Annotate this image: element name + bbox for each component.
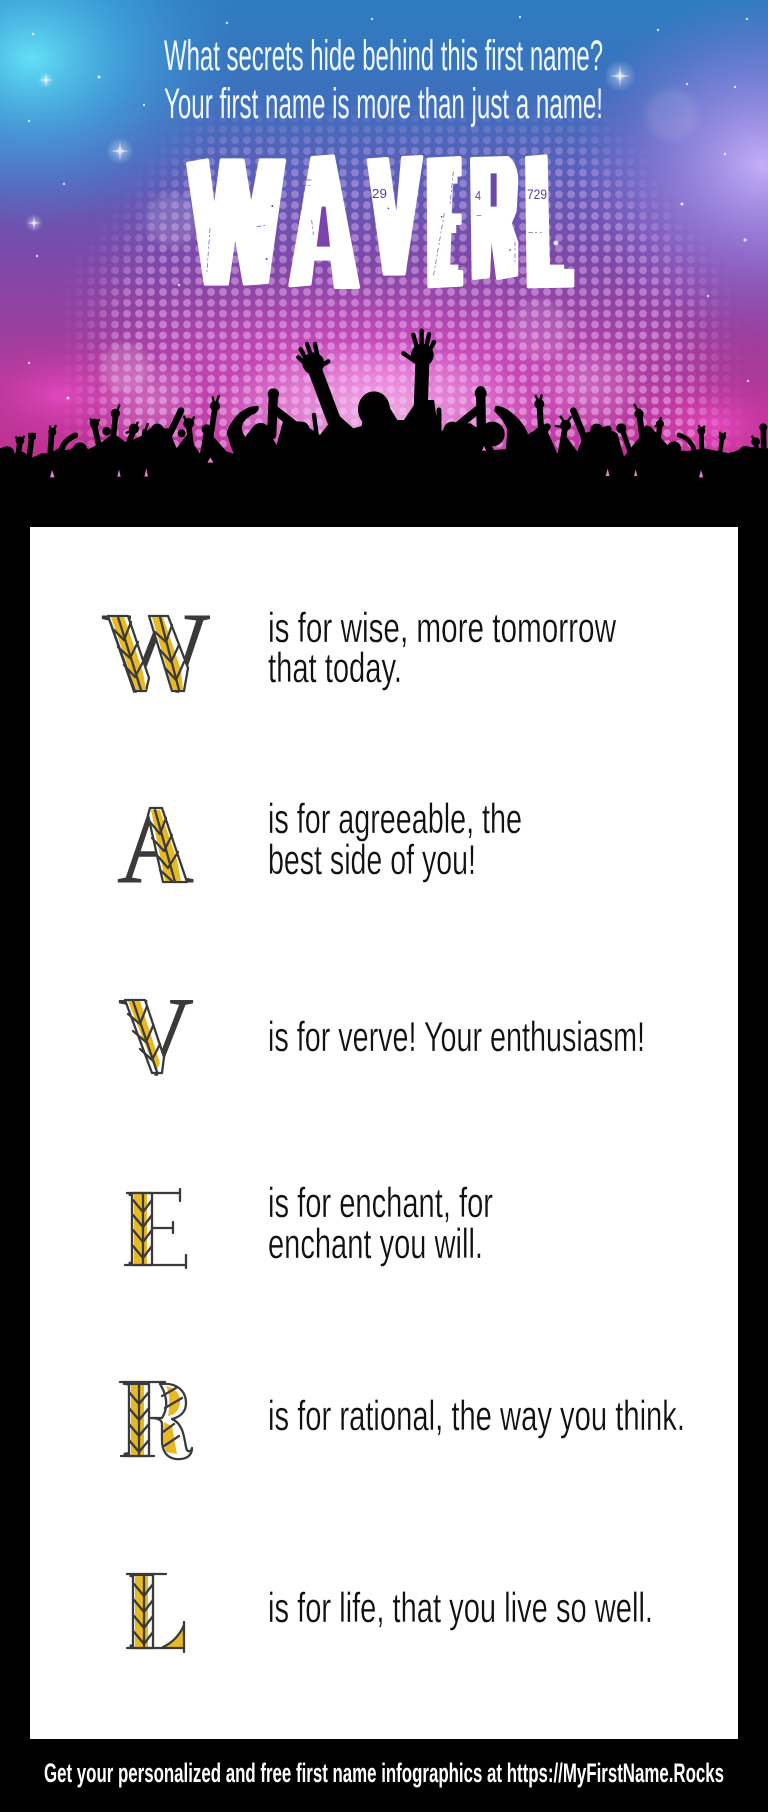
letter icon E (124, 1188, 188, 1270)
title: WAVERL (188, 124, 572, 321)
text W: is for wise, more tomorrow (268, 604, 616, 651)
letter icon L (126, 1572, 186, 1654)
header question text (164, 32, 603, 128)
row A (117, 783, 522, 907)
text W: that today. (268, 644, 402, 691)
title: WAVERL: V (372, 127, 420, 306)
letter icon V: V (118, 975, 194, 1099)
letter icon L: L (127, 1548, 186, 1673)
title: WAVERL: 4 (475, 188, 481, 203)
title: heavy distressed strokes (188, 156, 572, 287)
text A (268, 795, 522, 883)
row W (102, 589, 616, 716)
text A: is for agreeable, the (268, 795, 522, 842)
title: WAVERL: 29 (372, 186, 387, 201)
letter icon A: A (117, 783, 194, 907)
header background: stage lights (0, 0, 768, 505)
row L (126, 1572, 650, 1654)
letter icon R (118, 1380, 194, 1460)
crowd: left half (0, 344, 390, 520)
dot matrix wall (66, 114, 736, 454)
crowd silhouette (0, 331, 768, 530)
row V (118, 975, 645, 1099)
stars and sparkles (25, 16, 749, 400)
text: L (530, 126, 566, 321)
text E: is for enchant, for (268, 1179, 493, 1226)
title: WAVERL: E (432, 126, 460, 321)
text E (268, 1179, 493, 1267)
title: WAVERL: A (294, 126, 354, 321)
title: WAVERL: 729 (527, 186, 547, 202)
white content panel (30, 527, 738, 1739)
letter icon W: W (102, 589, 210, 716)
text W (268, 604, 616, 691)
text E: enchant you will. (268, 1220, 483, 1267)
crowd: right half (384, 331, 768, 520)
text A: best side of you! (268, 836, 476, 883)
letter icon E: E (126, 1167, 187, 1289)
title: WAVERL: W (191, 124, 281, 319)
row R (118, 1380, 682, 1460)
row E (124, 1186, 492, 1270)
letter icon R: R (120, 1356, 194, 1481)
title: WAVERL: R (475, 127, 513, 311)
